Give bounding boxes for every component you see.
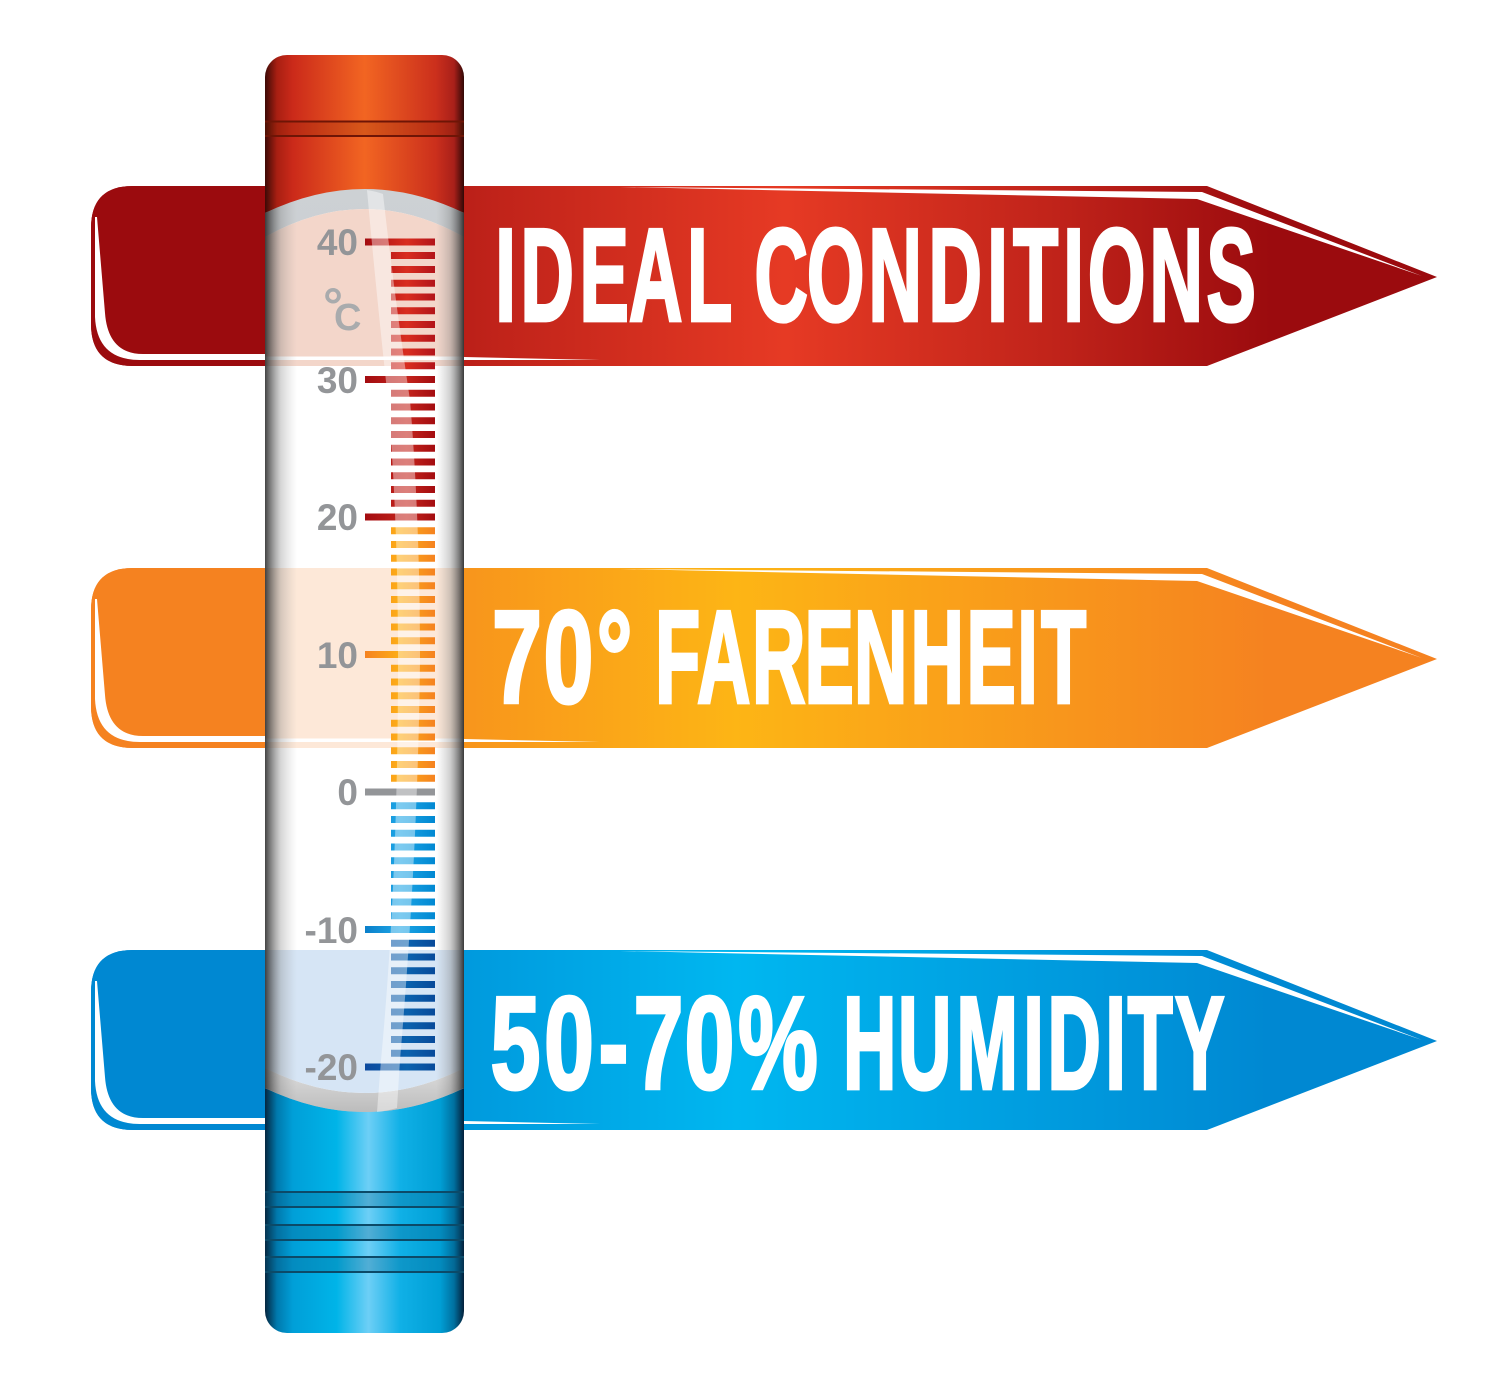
- blue bottom cap: [265, 1088, 464, 1333]
- tick marks: dark blue: [365, 940, 435, 1070]
- heading: 70 degrees farenheit: 70°: [492, 583, 632, 731]
- banner: ideal conditions: [91, 186, 1437, 366]
- tick marks: red lower: [365, 376, 435, 520]
- heading: humidity: 50-70%: [491, 969, 818, 1117]
- temperature scale labels: 30: [317, 360, 358, 401]
- thermometer: [265, 55, 464, 1333]
- banner: humidity: [91, 950, 1437, 1130]
- tick mark: zero: [365, 788, 435, 796]
- temperature scale labels: 20: [317, 497, 358, 538]
- glass tube: [265, 186, 464, 1146]
- glass highlight strip: [367, 190, 420, 1112]
- degrees celsius label: [325, 288, 360, 330]
- degrees celsius label: C: [334, 297, 361, 339]
- temperature scale labels: 10: [317, 635, 358, 676]
- banner: 70 degrees farenheit: [91, 568, 1437, 748]
- tick marks: orange: [365, 527, 435, 782]
- temperature scale labels: 0: [337, 772, 358, 813]
- tick marks: red upper: [365, 238, 435, 369]
- temperature scale labels: -20: [305, 1047, 358, 1088]
- heading: humidity: [491, 969, 1224, 1117]
- heading: 70 degrees farenheit: FARENHEIT: [655, 583, 1086, 731]
- tick marks: blue: [365, 802, 435, 933]
- heading: ideal conditions: IDEAL CONDITIONS: [495, 201, 1256, 349]
- red top cap: [265, 55, 464, 213]
- temperature scale labels: 40: [317, 222, 358, 263]
- degrees celsius label: °: [323, 278, 343, 334]
- temperature scale labels: -10: [305, 910, 358, 951]
- heading: humidity: HUMIDITY: [843, 969, 1224, 1117]
- temperature scale labels: [305, 222, 358, 1088]
